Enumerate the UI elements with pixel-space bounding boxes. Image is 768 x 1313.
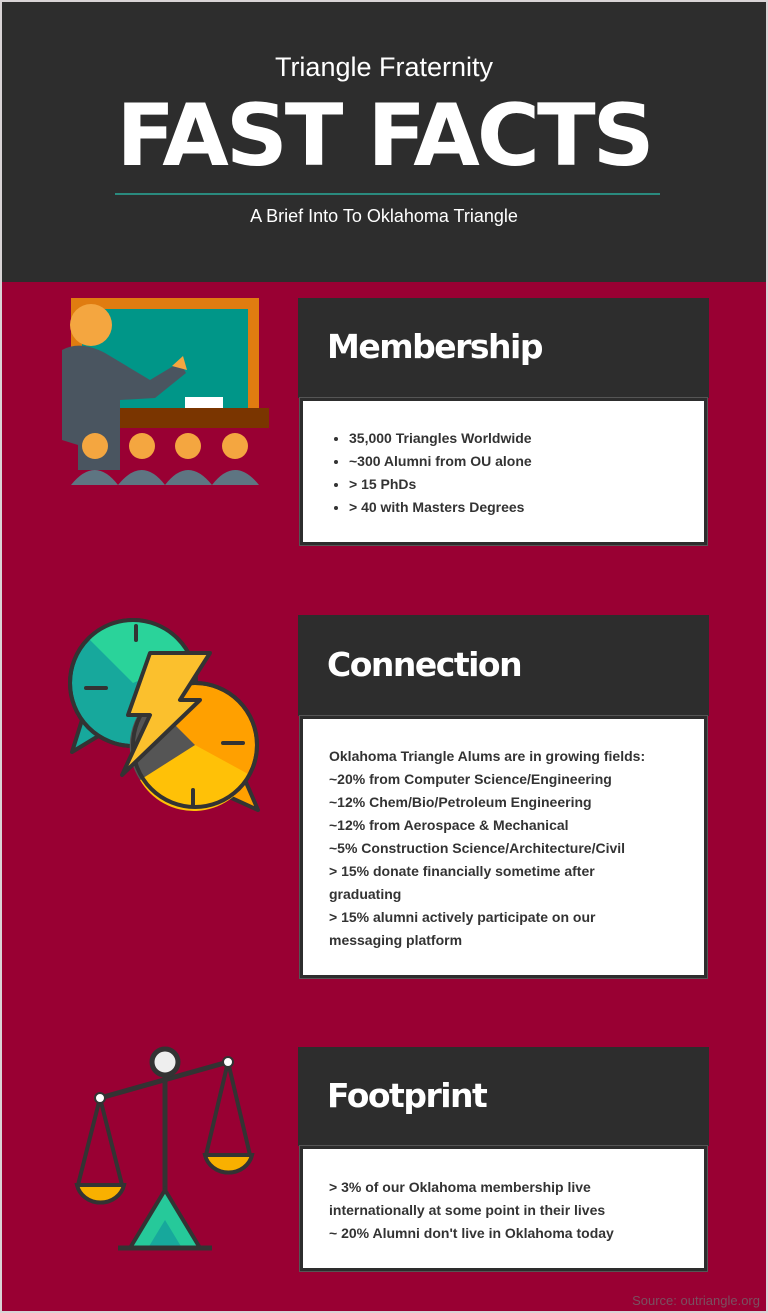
text: connection: Oklahoma Triangle Alums are in growing fields: [329, 748, 645, 764]
heading: connection: Connection [327, 645, 521, 684]
heading: connection [298, 615, 709, 716]
tagline: A Brief Into To Oklahoma Triangle [250, 206, 518, 226]
text: footprint: > 3% of our Oklahoma membership live [329, 1179, 591, 1195]
text: connection: > 15% alumni actively participate on our [329, 909, 595, 925]
heading: membership [298, 298, 709, 398]
heading: membership: Membership [327, 327, 542, 366]
text: connection: messaging platform [329, 932, 462, 948]
title: FAST FACTS [116, 86, 652, 186]
text: footprint [300, 1146, 707, 1271]
panel: footprint [298, 1047, 709, 1272]
icon: teacher [62, 298, 269, 485]
text: footprint: ~ 20% Alumni don't live in Oklahoma today [329, 1225, 614, 1241]
text: connection: ~5% Construction Science/Architecture/Civil [329, 840, 625, 856]
icon: chat bubbles [68, 618, 260, 812]
header [2, 2, 766, 282]
text: connection: ~12% Chem/Bio/Petroleum Engineering [329, 794, 592, 810]
source note: Source: outriangle.org [632, 1293, 760, 1308]
text: connection: > 15% donate financially sometime after [329, 863, 595, 879]
list: membership: > 40 with Masters Degrees [349, 499, 524, 515]
list: membership: 35,000 Triangles Worldwide [349, 430, 532, 446]
text: connection: graduating [329, 886, 401, 902]
text: footprint: internationally at some point in their lives [329, 1202, 605, 1218]
text: connection: ~20% from Computer Science/Engineering [329, 771, 612, 787]
text: connection [300, 716, 707, 978]
list: membership: > 15 PhDs [349, 476, 416, 492]
panel: membership [298, 298, 709, 546]
heading: footprint [298, 1047, 709, 1146]
list: membership: ~300 Alumni from OU alone [349, 453, 532, 469]
text: connection: ~12% from Aerospace & Mechanical [329, 817, 569, 833]
panel: connection [298, 615, 709, 979]
list: membership [300, 398, 707, 545]
heading: footprint: Footprint [327, 1076, 486, 1115]
icon: scales [74, 1046, 254, 1250]
subtitle top: Triangle Fraternity [275, 52, 493, 82]
